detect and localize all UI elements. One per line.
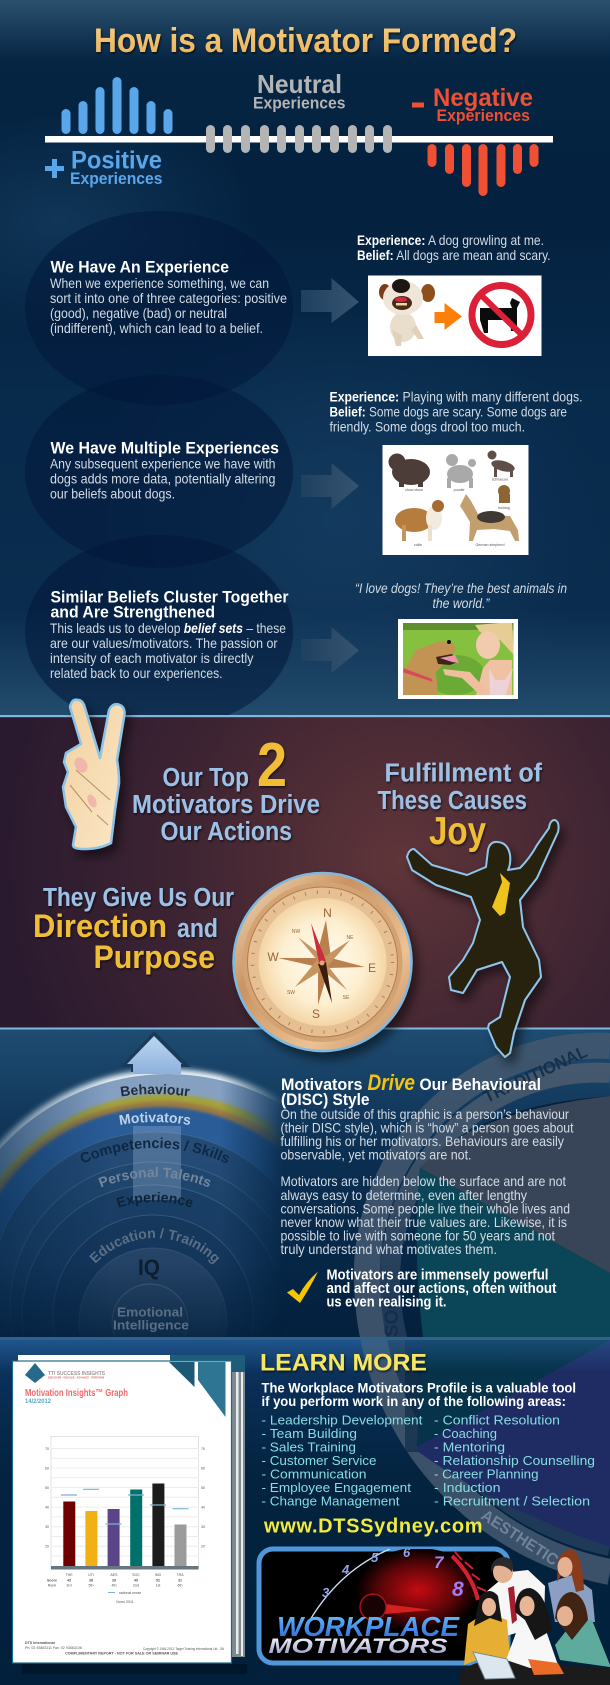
text: motivators drive behavioural style [280,1070,574,1257]
step 1: we have an experience: (good), negative (bad) or neutral [50,305,227,321]
step 3: similar beliefs cluster: intensity of each motivator is directly [50,650,254,666]
negative bars [428,144,538,196]
step 3: similar beliefs cluster: are our values/motivators. The passion or [50,635,278,651]
step 3: similar beliefs cluster: related back to our experiences. [50,665,222,681]
text: motivators drive behavioural style: (DISC) Style [281,1090,370,1109]
chart table: TRA [176,1573,184,1577]
chart table: 6th [178,1584,182,1588]
list: areas right column [434,1412,595,1508]
label: negative experiences [412,84,533,125]
report: motivation insights graph [12,1355,247,1674]
layer labels [80,1084,229,1264]
layer: emotional intelligence: Intelligence [113,1318,189,1332]
report footer: 36 [220,1647,224,1651]
list: areas right column: - Mentoring [434,1440,505,1454]
logo wordmark [268,1611,460,1658]
quote: the world.” [432,595,491,611]
chart table: SOC [132,1573,140,1577]
icon: german shepherd [460,494,519,541]
report title: 14/2/2012 [25,1398,51,1405]
list: areas right column: - Coaching [434,1426,497,1441]
speedometer: 6 [403,1545,411,1560]
bar chart: 50 [201,1486,205,1490]
bar chart: 50 [45,1486,49,1490]
report footer [25,1641,224,1656]
chart table: 49 [134,1578,138,1582]
text: motivators drive behavioural style: Motivators are hidden below the surface and are not [280,1173,566,1189]
experience timeline chart [45,77,553,196]
heading: fulfillment causes joy: Fulfillment of [384,760,542,788]
chart table: THE [65,1573,73,1577]
wheel background graphic [0,1042,610,1572]
woman [443,622,514,695]
chart table: Score [47,1578,57,1582]
step 1: we have an experience: sort it into one of three categories: positive [50,290,287,306]
layer: behaviour: Behaviour [120,1084,190,1096]
list: areas left column [262,1412,423,1508]
text: motivators drive behavioural style: Drive [368,1070,415,1095]
list: areas left column: - Customer Service [262,1453,376,1468]
quote: “I love dogs! They’re the best animals in [355,580,567,596]
bar chart: 70 [45,1447,49,1451]
bar chart: 70 [201,1447,205,1451]
callout: motivators are powerful: and affect our actions, often without [326,1281,557,1297]
arrow 2 [301,463,359,509]
positive bars [62,77,172,134]
heading: our top 2 motivators: Our Actions [160,818,292,846]
speedometer: 4 [341,1562,350,1577]
heading: direction and purpose: and [177,915,218,943]
text: motivators drive behavioural style: On the outside of this graphic is a person’s behaviour [280,1106,569,1122]
speedometer [310,1545,486,1632]
icon: bulldog [498,485,510,503]
heading: direction and purpose: Direction [33,908,167,944]
step 2: we have multiple experiences: Any subsequent experience we have with [50,456,276,472]
bar chart [45,1436,205,1604]
compass letters: W [267,950,279,964]
layer: education and training: Education / Training [89,1228,220,1264]
logo wordmark: WORKPLACE [277,1611,460,1642]
title: How is a Motivator Formed? [94,22,517,60]
chart table: 5th [88,1584,94,1588]
label: positive experiences: Experiences [70,170,162,188]
speedometer: 5 [371,1550,379,1565]
report footer: Ph: 02 93863111 Fax: 02 93663106 [25,1646,82,1650]
step 1: we have an experience: (indifferent), which can lead to a belief. [50,320,263,336]
breed captions: schnauzer [492,478,509,482]
chart table: Norm 2011 [116,1600,134,1604]
label: neutral experiences [253,69,346,112]
label: negative experiences: Experiences [436,107,530,125]
step 2: we have multiple experiences: our beliefs about dogs. [50,486,175,502]
chart table: national mean [119,1591,141,1595]
heading: our top 2 motivators: Motivators Drive [132,791,320,819]
chart table: 1st [156,1584,160,1588]
chart table: 2nd [133,1584,139,1588]
woman in yellow [464,1591,510,1665]
heading: learn more: LEARN MORE [260,1350,427,1376]
text: motivators drive behavioural style: truly understand what motivates them. [280,1241,497,1257]
heading: direction and purpose [33,884,234,975]
heading: our top 2 motivators [132,731,320,846]
bar chart: 40 [45,1506,49,1510]
wheel label: social: SOC [382,1296,403,1337]
step 1 caption [357,232,550,263]
step 2 caption: Experience: Playing with many different dogs. [330,388,582,404]
laptop [473,1652,515,1679]
breed captions: poodle [454,488,464,492]
text: motivators drive behavioural style: (their DISC style), which is “how” a person goes about [280,1120,574,1136]
diagram: concentric layers [0,1031,282,1337]
section: top 2 motivators [0,700,610,1030]
chart table: IND [155,1573,161,1577]
chart table: 38 [89,1578,93,1582]
bar chart: 60 [45,1466,49,1470]
step 1: we have an experience: We Have An Experience [50,258,229,276]
chart table [47,1573,184,1604]
step 1 caption: Belief: All dogs are mean and scary. [357,247,550,263]
speedometer: 8 [452,1578,464,1601]
chart table: 43 [67,1578,71,1582]
heading: our top 2 motivators: Our Top [162,764,249,792]
list: areas left column: - Sales Training [262,1440,356,1454]
woman in white [506,1588,558,1668]
speedometer: 3 [322,1585,330,1600]
website url: www.DTSSydney.com [263,1516,482,1538]
quote [355,580,567,611]
photo: woman with dog [398,619,518,699]
text: motivators drive behavioural style: possible to live with someone for 50 years and not [280,1228,555,1244]
report footer: DTS International [25,1641,55,1645]
man [486,1557,545,1640]
arrow 3 [301,627,359,673]
dog [403,640,459,695]
chart table: UTI [88,1573,94,1577]
layer: emotional intelligence [114,1307,188,1332]
list: areas left column: - Employee Engagement [262,1480,411,1495]
chart table: Rank [48,1584,56,1588]
report title: Motivation Insights™ Graph [25,1388,128,1399]
logo: workplace motivators [259,1545,508,1663]
step 2: we have multiple experiences: dogs adds more data, potentially altering [50,470,276,486]
image: dog breeds [382,445,528,555]
ovals behind steps [25,211,293,729]
compass letters: SW [287,990,295,996]
list: areas right column: - Conflict Resolution [434,1412,560,1428]
wheel label: traditional: TRADITIONAL [481,1042,590,1107]
logo wordmark: MOTIVATORS [268,1635,448,1658]
text: motivators drive behavioural style: observable, yet motivators are not. [280,1146,472,1162]
report footer: Copyright © 1984-2013. Target Training International Ltd. [143,1647,218,1651]
section: behavioural style background [0,1030,610,1685]
text: motivators drive behavioural style: never know what their true values are. Likewise, it is [280,1214,567,1230]
layer: competencies and skills: Competencies / Skills [80,1138,229,1163]
bar chart: 60 [201,1466,205,1470]
heading: fulfillment causes joy [378,760,542,853]
front page [12,1361,232,1663]
report footer: COMPLIMENTARY REPORT - NOT FOR SALE OR SEMINAR USE [65,1652,179,1656]
list: areas right column: - Recruitment / Selection [434,1494,590,1508]
step 2 caption: Belief: Some dogs are scary. Some dogs are [330,404,567,420]
callout: motivators are powerful [326,1268,557,1310]
logo: TTI SUCCESS INSIGHTS [48,1371,105,1377]
compass letters: SE [343,995,350,1001]
text: motivators drive behavioural style: Motivators [281,1075,362,1094]
intro text [262,1380,576,1409]
icon: peace hand [63,700,125,849]
bar chart: 20 [45,1544,49,1548]
folder [528,1659,564,1675]
label: neutral experiences: Neutral [257,69,342,99]
callout: motivators are powerful: us even realising it. [326,1294,446,1310]
compass letters: NE [347,935,354,941]
step 2 caption: friendly. Some dogs drool too much. [330,418,525,434]
timeline bar [45,136,553,142]
text: motivators drive behavioural style: always easy to determine, even after lengthy [280,1187,527,1203]
breed captions: German shepherd [476,543,504,547]
chart table: AES [110,1573,118,1577]
compass star [278,920,365,1005]
report title [25,1388,128,1405]
breed captions: chow chow [405,488,423,492]
compass letters: S [312,1007,320,1021]
bar chart: 30 [45,1525,49,1529]
bar chart: 40 [201,1506,205,1510]
logo [25,1363,105,1383]
step 1 caption: Experience: A dog growling at me. [357,232,544,248]
breed captions: collie [414,543,422,547]
breed captions [405,478,510,547]
step 1: we have an experience: When we experience something, we can [50,275,269,291]
chart table: 3rd [66,1584,72,1588]
icon: growling dog [379,279,435,346]
compass letters [267,906,376,1021]
icon: poodle [446,454,476,488]
step 2: we have multiple experiences [50,438,279,502]
step 2 caption [330,388,582,434]
icon: compass [234,873,412,1051]
list: areas left column: - Leadership Development [262,1412,423,1428]
list: areas left column: - Change Management [262,1494,400,1508]
breed captions: bulldog [498,506,510,510]
section: how a motivator is formed [0,0,610,740]
wheel label: aesthetic: AESTHETIC [478,1507,561,1570]
bar chart: 20 [201,1544,205,1548]
step 2: we have multiple experiences: We Have Multiple Experiences [50,438,279,458]
layer: personal talents: Personal Talents [98,1166,210,1188]
step 1: we have an experience [50,258,287,336]
list: areas right column: - Induction [434,1480,500,1495]
compass letters: E [368,961,376,975]
icon: jumping man [407,820,559,1057]
text: motivators drive behavioural style: Our Behavioural [420,1075,541,1094]
icon: collie [395,500,444,541]
callout: motivators are powerful: Motivators are immensely powerful [326,1268,548,1284]
icon: check mark [287,1272,318,1303]
step 3: similar beliefs cluster: This leads us to develop belief sets – these [50,620,286,636]
heading: fulfillment causes joy: These Causes [378,787,527,815]
speedometer: 7 [434,1553,445,1572]
text: motivators drive behavioural style: conversations. Some people live their whole lives and [280,1200,570,1216]
woman with red hair [548,1550,595,1622]
label: negative experiences: Negative [433,84,533,112]
list: areas right column: - Relationship Counselling [434,1453,595,1468]
chart table: 31 [178,1578,182,1582]
intro text: if you perform work in any of the following areas: [262,1394,566,1409]
layer: motivators: Motivators [119,1112,190,1125]
icon: chow chow [388,454,430,487]
icon: no dogs sign [472,286,531,344]
text: motivators drive behavioural style: fulfilling his or her motivators. Behaviours are easily [280,1133,564,1149]
list: areas left column: - Communication [262,1466,366,1482]
icon: up arrow [120,1031,191,1200]
illustration: team at laptop [460,1550,610,1685]
label: positive experiences: Positive [71,146,162,174]
compass letters: N [323,906,332,920]
heading: fulfillment causes joy: Joy [429,810,486,853]
neutral bars [206,125,392,153]
heading: our top 2 motivators: 2 [257,731,287,800]
layer: experience: Experience [116,1192,192,1208]
chart table: 52 [156,1578,160,1582]
logo: DISCOVER · ENGAGE · ADVANCE · PERFORM [48,1376,105,1380]
compass letters: NW [292,929,300,935]
icon: schnauzer [488,450,516,477]
tie [492,873,510,916]
heading: direction and purpose: They Give Us Our [43,884,234,912]
step 3: similar beliefs cluster: and Are Strengthened [50,602,215,622]
chart table: 39 [112,1578,116,1582]
layer: emotional intelligence: Emotional [117,1304,183,1320]
list: areas left column: - Team Building [262,1426,357,1441]
table [460,1660,610,1685]
label: positive experiences [45,146,162,188]
chart table: 4th [112,1584,116,1588]
page corner [169,1362,226,1417]
image: growling dog and no-dogs sign [368,276,542,356]
intro text: The Workplace Motivators Profile is a valuable tool [262,1380,576,1396]
arrow 1 [301,278,359,323]
layer: IQ: IQ [138,1255,160,1280]
step 3: similar beliefs cluster: Similar Beliefs Cluster Together [50,588,289,606]
back pages [18,1355,247,1674]
heading: direction and purpose: Purpose [94,939,215,975]
bar chart: 30 [201,1525,205,1529]
step 3: similar beliefs cluster [50,588,289,681]
list: areas right column: - Career Planning [434,1466,538,1482]
icon: orange arrow [434,303,462,330]
label: neutral experiences: Experiences [253,94,346,112]
woman in teal [555,1592,610,1667]
